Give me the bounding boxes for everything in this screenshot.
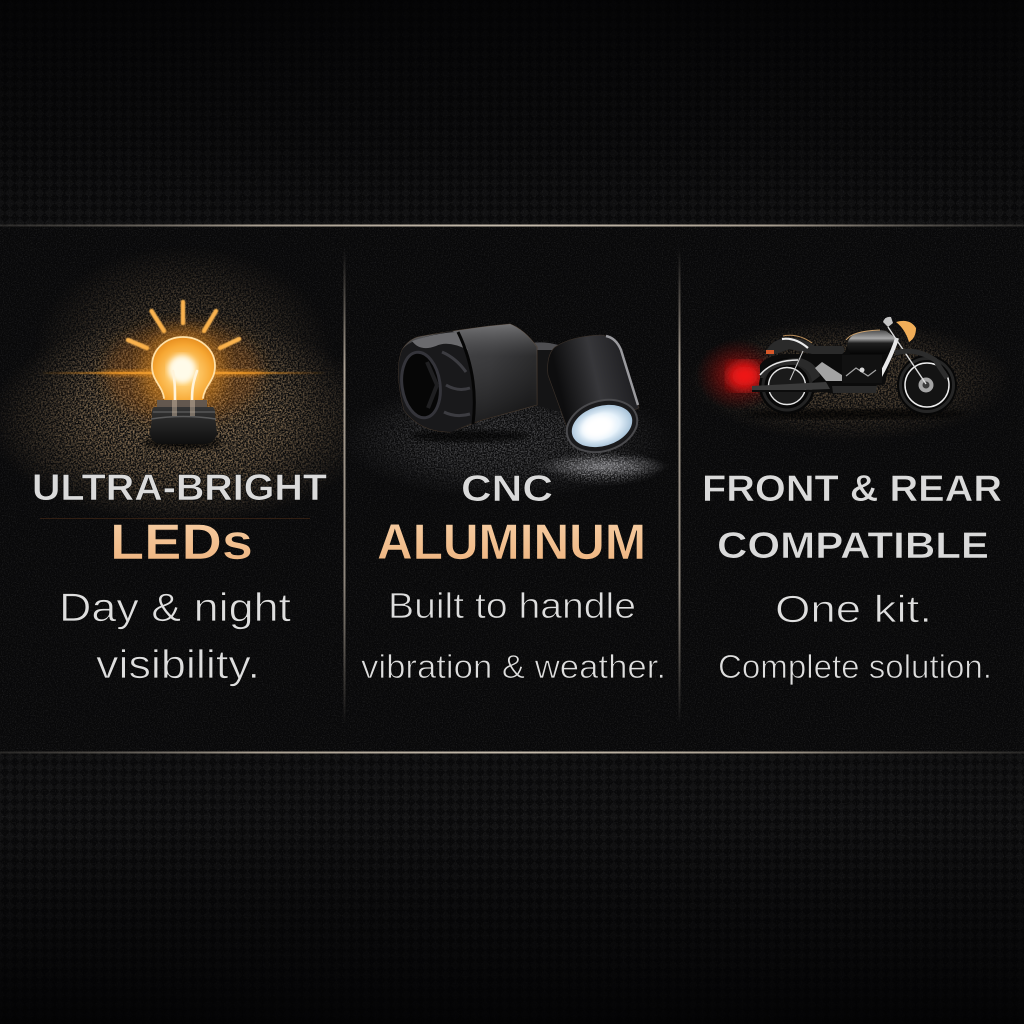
heading: COMPATIBLE: COMPATIBLE	[717, 525, 989, 566]
body: visibility: visibility.	[96, 643, 260, 687]
body: Built to handle: Built to handle	[388, 585, 636, 626]
heading: LEDs: LEDs	[110, 514, 253, 570]
body: vibration and weather: vibration & weather.	[361, 648, 666, 685]
feature band	[0, 224, 1024, 754]
heading: CNC: CNC	[461, 468, 553, 509]
heading: FRONT and REAR: FRONT & REAR	[702, 468, 1002, 509]
panel: front and rear compatible	[698, 316, 1002, 685]
body: Complete solution: Complete solution.	[718, 648, 992, 685]
panel: CNC aluminum	[351, 324, 664, 678]
panel: ultra-bright LEDs	[0, 226, 344, 687]
icon: CNC aluminum LED light	[351, 324, 664, 494]
body: Day and night: Day & night	[59, 586, 291, 630]
heading: ALUMINUM: ALUMINUM	[377, 514, 646, 570]
icon: motorcycle with red tail glow	[698, 316, 1002, 438]
heading: ULTRA-BRIGHT: ULTRA-BRIGHT	[32, 467, 327, 508]
icon: glowing light bulb	[0, 253, 344, 520]
body: One kit: One kit.	[775, 589, 932, 631]
